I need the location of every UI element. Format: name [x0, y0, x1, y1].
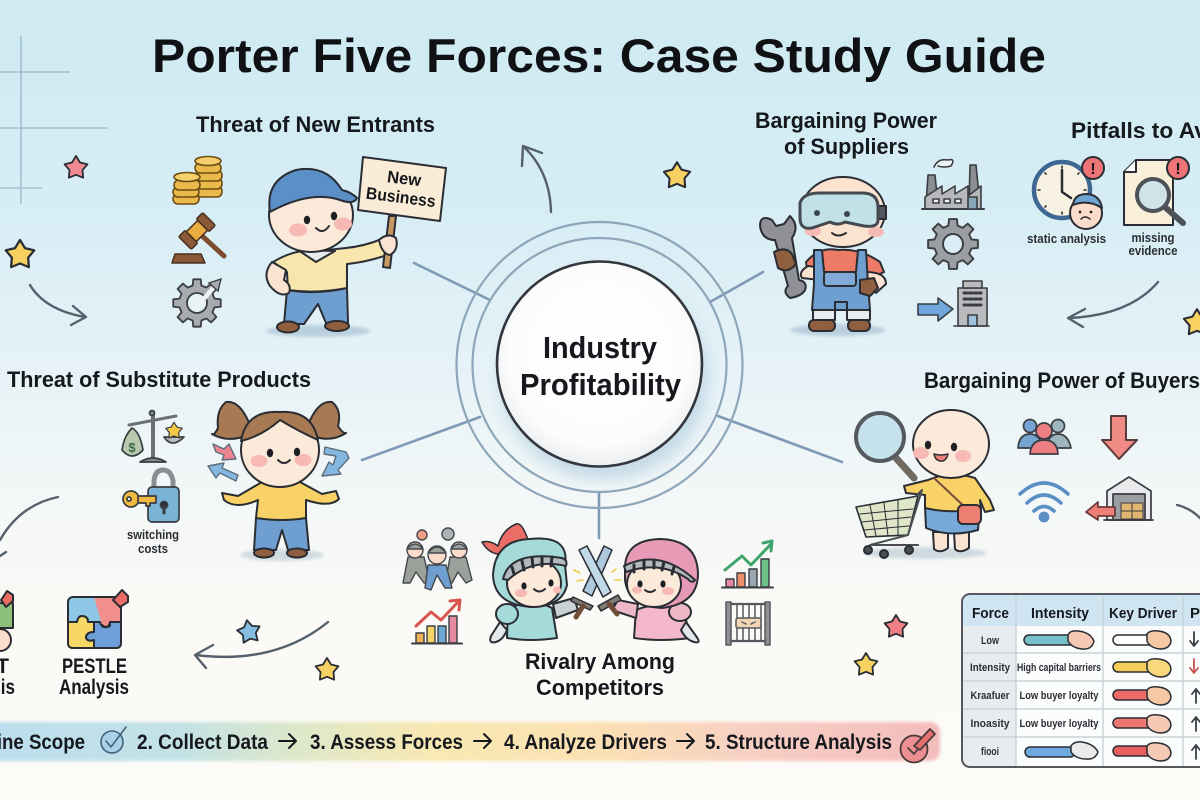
label: PESTLE Analysis: Analysis	[59, 676, 129, 699]
arrow	[474, 734, 491, 748]
intensity column: High capital barriers	[1017, 662, 1101, 674]
character: girl with pigtails	[212, 402, 346, 561]
icon: balance scale	[122, 410, 184, 462]
icon: crowd of competitors	[403, 528, 472, 590]
step 3: 3. Assess Forces	[310, 731, 463, 754]
icon: document with magnifier: !	[1175, 161, 1181, 178]
column 1 labels: Kraafuer	[970, 690, 1010, 702]
panel: threat of substitute products	[7, 367, 349, 561]
decorative stars	[6, 156, 1200, 680]
icon: arrow to building	[918, 281, 989, 326]
profit trend arrows	[1190, 632, 1200, 759]
hub label: Profitability	[520, 367, 682, 402]
table outline	[962, 594, 1200, 767]
icon: PESTLE puzzle	[68, 590, 128, 648]
character: blue knight	[482, 524, 578, 642]
table header: Force	[972, 605, 1009, 622]
panel: frameworks	[0, 590, 129, 699]
hub: industry profitability	[456, 222, 742, 508]
column 1 labels: Inoasity	[970, 718, 1010, 730]
arrow	[677, 734, 694, 748]
column 1 labels: Low	[981, 635, 999, 647]
icon: key and lock	[123, 470, 179, 522]
label: SWOT Analysis	[0, 655, 15, 699]
label: missing evidence: missing	[1132, 231, 1174, 245]
icon: people group	[1018, 420, 1071, 454]
icon: SWOT figure	[0, 591, 13, 651]
intensity column: Low buyer loyalty	[1020, 690, 1099, 702]
icon: blue check	[101, 727, 126, 753]
label: PESTLE Analysis	[59, 655, 129, 699]
title: Porter Five Forces: Case Study Guide	[152, 29, 1046, 82]
icon: price down arrow	[1102, 416, 1137, 459]
step 4: 4. Analyze Drivers	[504, 731, 667, 754]
column 1 labels: Intensity	[970, 662, 1011, 674]
icon: rising bar chart red	[412, 600, 462, 644]
icon: gavel	[172, 213, 224, 263]
label: switching costs	[127, 528, 179, 556]
column 1 labels	[970, 635, 1011, 758]
label: switching costs: costs	[138, 542, 168, 556]
panel: force table	[962, 594, 1200, 767]
icon: document with magnifier	[1124, 157, 1189, 225]
icon: gear with arrow	[173, 279, 221, 327]
heading	[525, 649, 675, 700]
icon: balance scale: $	[128, 440, 136, 455]
column 1 labels: fiooi	[981, 746, 999, 758]
character: entrepreneur with sign	[266, 157, 446, 337]
heading: Rivalry Among	[525, 649, 675, 674]
arrow	[279, 734, 296, 748]
first column shade	[962, 626, 1016, 767]
hub label: Industry	[543, 330, 658, 365]
icon: crossed swords	[571, 546, 621, 617]
heading: Threat of New Entrants	[196, 112, 435, 137]
heading: Threat of Substitute Products	[7, 367, 311, 392]
step 2: 2. Collect Data	[137, 731, 268, 754]
icon: coins	[173, 156, 222, 204]
intensity column	[1017, 631, 1101, 759]
icon: warehouse with arrow	[1086, 477, 1153, 520]
panel: rivalry among competitors	[403, 524, 773, 700]
panel: pitfalls to avoid	[1027, 118, 1200, 258]
table header: Intensity	[1031, 605, 1090, 622]
icon: gear	[928, 219, 978, 269]
heading: Bargaining Power	[755, 108, 937, 133]
character: shopper with magnifier and cart	[856, 410, 994, 559]
icon: red check	[900, 729, 935, 762]
heading	[755, 108, 937, 159]
intensity column: Low buyer loyalty	[1020, 718, 1099, 730]
sign text: New	[386, 167, 423, 190]
spokes from hub to forces	[362, 263, 842, 538]
label: static analysis: static analysis	[1027, 231, 1106, 246]
cycle arrows	[0, 146, 1200, 668]
label: PESTLE Analysis: PESTLE	[62, 655, 127, 678]
character: supplier with goggles and wrench	[760, 177, 886, 336]
sign text: Business	[365, 184, 437, 211]
table header	[962, 594, 1200, 626]
sign text	[365, 165, 439, 211]
step 5: 5. Structure Analysis	[705, 731, 892, 754]
key driver column	[1113, 631, 1171, 761]
label: missing evidence	[1128, 231, 1178, 258]
icon: clock with worried face: !	[1090, 161, 1096, 178]
panel: bargaining power of buyers	[856, 368, 1200, 559]
heading: of Suppliers	[784, 134, 909, 159]
icon: barred gate	[726, 602, 770, 645]
panel: threat of new entrants	[172, 112, 446, 337]
character: pink knight	[612, 539, 699, 642]
heading: Competitors	[536, 675, 664, 700]
icon: wifi signal	[1020, 483, 1068, 521]
process band	[0, 722, 940, 762]
icon: factory	[922, 160, 984, 209]
table header: Key Driver	[1109, 605, 1177, 622]
decorative sketch grid	[0, 36, 108, 204]
icon: rising bar chart green	[722, 541, 773, 588]
icon: clock with worried face	[1034, 157, 1104, 229]
panel: bargaining power of suppliers	[755, 108, 989, 336]
hub label	[520, 330, 682, 402]
label: missing evidence: evidence	[1128, 244, 1178, 258]
label: switching costs: switching	[127, 528, 179, 542]
icon: swap arrows	[208, 444, 349, 481]
